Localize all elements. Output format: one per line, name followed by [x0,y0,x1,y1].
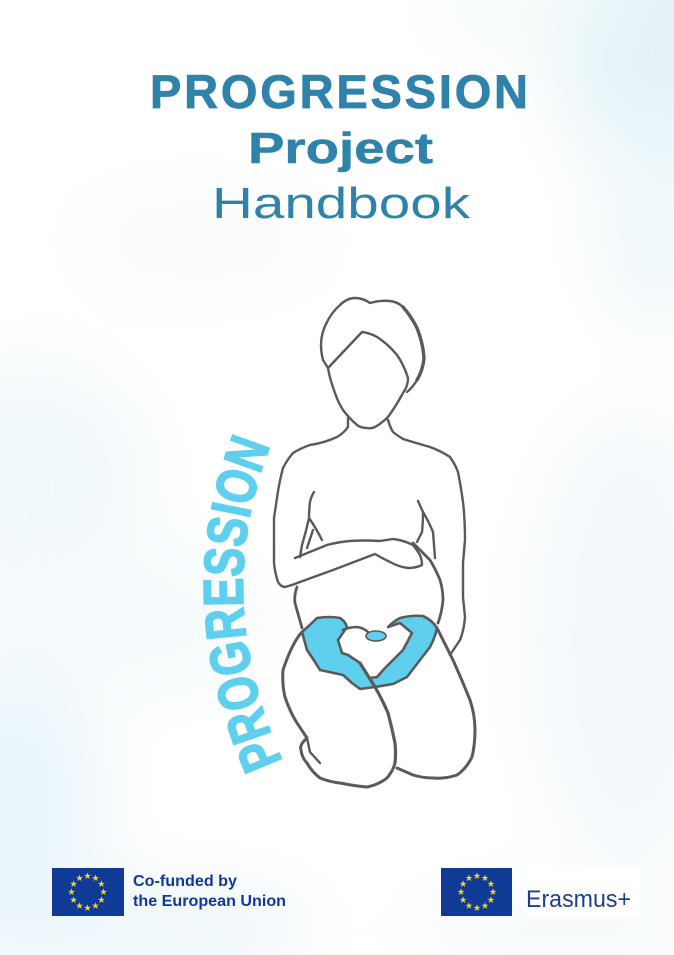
curved label: PROGRESSION [192,428,294,781]
sacrum oval [366,631,386,641]
Erasmus+ wordmark [525,866,640,916]
co-funded text: the European Union [133,893,286,910]
face [328,332,408,428]
curved label: PROGRESSION: R [193,606,258,643]
right shoulder and arm [388,420,465,655]
right thigh [397,628,475,778]
pelvis left wing [302,617,375,689]
curved label: PROGRESSION: N [212,428,282,479]
thigh white fill [283,628,475,787]
curved label: PROGRESSION: G [196,636,264,681]
thigh crease over pelvis [360,663,396,763]
EU flag [52,868,124,916]
pelvis [302,616,437,689]
co-funded text: Co-funded by [133,873,237,890]
logo: EU co-funded [52,868,286,916]
title line: Project: Project [248,124,433,173]
title line: PROGRESSION: PROGRESSION [150,65,528,118]
curved label: PROGRESSION: S [195,513,261,550]
co-funded text [133,873,286,910]
pelvis right wing [370,616,437,687]
title line: Handbook: Handbook [212,179,471,228]
left bust [300,492,322,557]
hair thick edge [403,307,424,380]
right bust [417,501,435,558]
left shoulder and arm [274,418,422,587]
curved label: PROGRESSION: P [225,730,294,781]
calf detail [307,738,320,763]
illustration: kneeling pregnant woman [274,298,475,787]
pelvis hole outline [343,627,368,632]
curved label: PROGRESSION: O [204,669,273,718]
title [150,65,528,228]
curved label: PROGRESSION: R [214,701,283,751]
EU flag [441,868,512,916]
curved label: PROGRESSION: E [192,577,255,607]
logo: Erasmus+ [441,866,640,916]
curved label: PROGRESSION: O [202,462,271,510]
Erasmus+ wordmark: Erasmus+ [526,886,631,913]
hair [321,298,424,392]
left thigh [283,632,395,787]
belly [295,543,443,628]
curved label: PROGRESSION: I [199,498,263,522]
curved label: PROGRESSION: S [192,545,257,578]
